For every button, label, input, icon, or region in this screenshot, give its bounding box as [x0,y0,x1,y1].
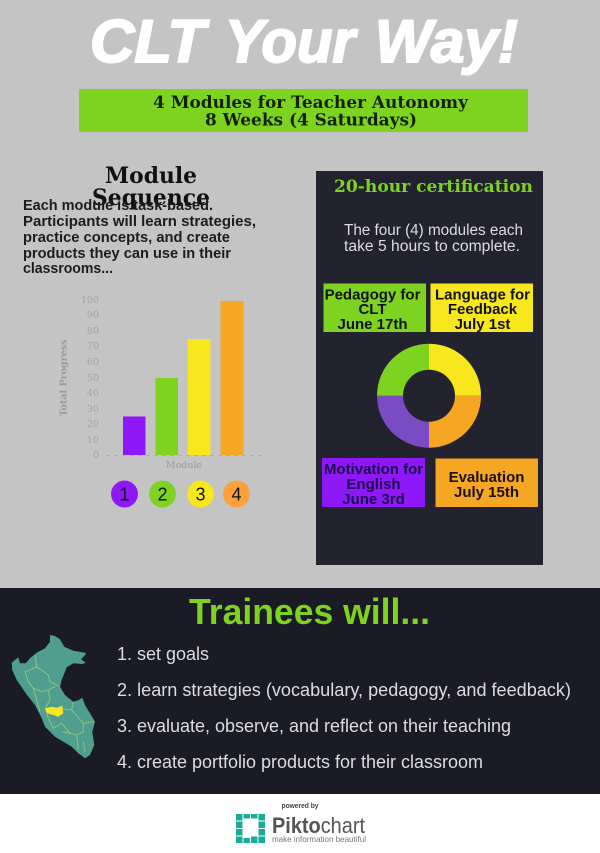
module box: evaluation: Evaluation [449,469,524,486]
bar chart: total progress by module: 70 [87,341,99,352]
donut chart [377,344,481,448]
module box: pedagogy [324,284,426,333]
icon: Piktochart logo [236,814,265,843]
text block: module hours [344,222,523,255]
bar chart: total progress by module: 20 [87,419,99,430]
text block: module hours: take 5 hours to complete. [344,238,520,255]
panel: certification [316,171,543,565]
banner: modules and weeks: 4 Modules for Teacher Autonomy [153,93,468,112]
module box: pedagogy: Pedagogy for [325,286,421,304]
banner: modules and weeks [79,89,528,132]
list: trainee outcomes: 2. learn strategies (vocabulary, pedagogy, and feedback) [117,680,571,700]
text block: module hours: The four (4) modules each [344,222,523,239]
title [90,8,518,75]
footer: Piktochart branding [0,794,600,853]
bar chart: total progress by module: 0 [93,450,99,461]
footer: Piktochart branding: Piktochart [272,813,365,838]
bar chart: total progress by module [58,295,264,471]
footer: Piktochart branding: make information beautiful [272,834,366,844]
bar chart: total progress by module: Total Progress [58,340,70,416]
bar chart: total progress by module: 50 [87,373,99,384]
list: trainee outcomes: 3. evaluate, observe, and reflect on their teaching [117,716,511,736]
icon: map of Peru [12,635,95,758]
bar chart: total progress by module: 100 [81,295,99,306]
heading: trainees will: Trainees will... [189,591,430,632]
footer: Piktochart branding: powered by [282,803,319,810]
heading: module sequence [92,163,210,211]
legend: module numbers: 2 [157,484,168,504]
bar chart: total progress by module: 80 [87,326,99,337]
bar chart: total progress by module: 40 [87,388,99,399]
module box: language: July 1st [455,316,510,333]
bar chart: total progress by module: 10 [87,435,99,446]
text block: module description: practice concepts, and create [23,229,230,246]
module box: evaluation [436,458,538,507]
legend: module numbers: 4 [231,484,242,504]
bar chart: total progress by module: Module [166,460,203,471]
list: trainee outcomes [117,644,571,772]
text block: module description: classrooms... [23,260,113,277]
panel: trainees [0,588,600,794]
module box: language: Feedback [448,301,518,318]
module box: motivation: June 3rd [342,491,405,508]
legend: module numbers: 3 [195,484,206,504]
title: Your [225,8,359,75]
module box: evaluation: July 15th [454,484,519,501]
bar chart: total progress by module: 60 [87,357,99,368]
banner: modules and weeks: 8 Weeks (4 Saturdays) [205,110,417,130]
module box: language [430,284,533,333]
module box: motivation: Motivation for [324,461,423,478]
heading: module sequence: Sequence [92,185,210,211]
list: trainee outcomes: 4. create portfolio products for their classroom [117,752,483,772]
title: Way! [375,8,518,75]
text block: module description: Each module is task-based. [23,197,213,214]
heading: module sequence: Module [105,163,197,189]
bar chart: total progress by module: 30 [87,404,99,415]
text block: module description [23,197,256,277]
legend: module numbers [111,480,250,508]
text block: module description: Participants will learn strategies, [23,213,256,230]
module box: language: Language for [435,286,530,304]
module box: pedagogy: June 17th [337,316,408,333]
module box: motivation: English [346,476,401,493]
heading: 20-hour certification: 20-hour certification [334,177,533,197]
legend: module numbers: 1 [119,484,130,504]
title: CLT [90,8,209,75]
bar chart: total progress by module: 90 [87,310,99,321]
module box: motivation [322,458,425,508]
module box: pedagogy: CLT [358,301,387,318]
text block: module description: products they can use in their [23,245,231,262]
list: trainee outcomes: 1. set goals [117,644,209,664]
